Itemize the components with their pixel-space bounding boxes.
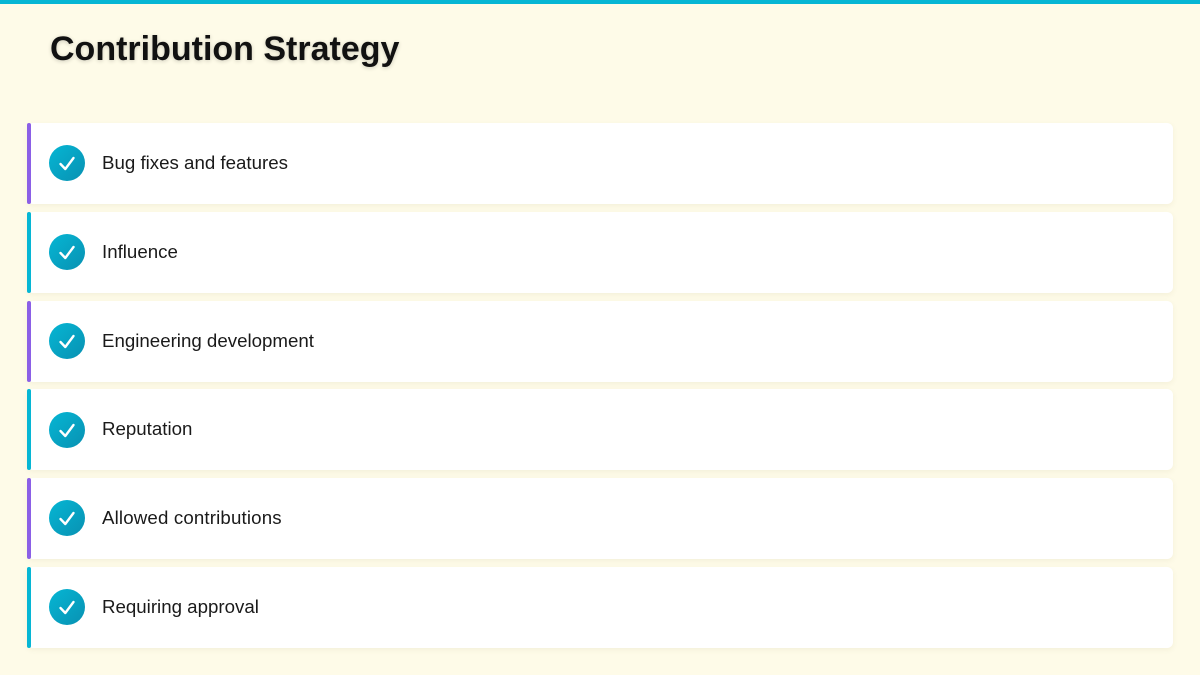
- title: Contribution Strategy: [50, 30, 399, 68]
- icon: check: [49, 500, 85, 536]
- card: Bug fixes and features: [27, 123, 1173, 204]
- icon: check: [49, 323, 85, 359]
- label: Reputation: [102, 418, 192, 439]
- card: Reputation: [27, 389, 1173, 470]
- card: Engineering development: [27, 301, 1173, 382]
- top accent bar: [0, 0, 1200, 4]
- card: Influence: [27, 212, 1173, 293]
- icon: check: [49, 145, 85, 181]
- card: Allowed contributions: [27, 478, 1173, 559]
- card: Requiring approval: [27, 567, 1173, 648]
- icon: check: [49, 234, 85, 270]
- icon: check: [49, 589, 85, 625]
- icon: check: [49, 412, 85, 448]
- label: Bug fixes and features: [102, 152, 288, 173]
- label: Allowed contributions: [102, 507, 282, 528]
- label: Engineering development: [102, 330, 314, 351]
- label: Requiring approval: [102, 596, 259, 617]
- label: Influence: [102, 241, 178, 262]
